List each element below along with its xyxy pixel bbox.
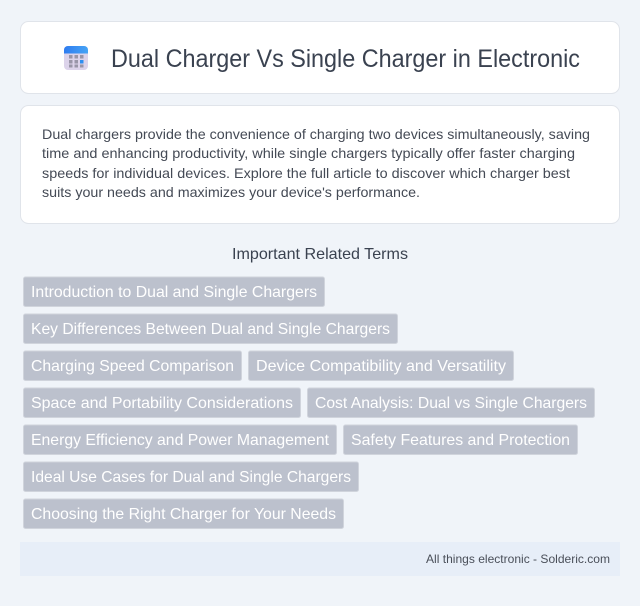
tag: [24, 351, 242, 380]
tag: [24, 499, 344, 528]
tag: Ideal Use Cases for Dual and Single Chargers: [31, 469, 351, 486]
tag: [24, 462, 358, 492]
intro text: Dual chargers provide the convenience of charging two devices simultaneously, saving: [42, 126, 590, 142]
intro panel: [20, 106, 620, 224]
intro text: suits your needs and maximizes your device's performance.: [42, 184, 420, 200]
tag: Introduction to Dual and Single Chargers: [31, 284, 317, 301]
tag: Space and Portability Considerations: [31, 395, 293, 412]
tag: Energy Efficiency and Power Management: [31, 432, 330, 449]
title: Dual Charger Vs Single Charger in Electronic: [111, 45, 580, 73]
tag: Choosing the Right Charger for Your Needs: [31, 506, 336, 523]
tag: [24, 425, 336, 454]
footer text: All things electronic - Solderic.com: [426, 552, 610, 566]
tag: [24, 314, 398, 344]
section heading: Important Related Terms: [232, 246, 408, 263]
tag: Safety Features and Protection: [351, 432, 570, 449]
tag: [24, 277, 324, 306]
tag: [248, 351, 514, 380]
header panel: [20, 22, 620, 94]
intro text: speeds for individual devices. Explore the full article to discover which charger best: [42, 165, 570, 181]
tag: [24, 388, 300, 418]
footer: [20, 542, 620, 576]
tag: Charging Speed Comparison: [31, 358, 234, 375]
intro text: time and enhancing productivity, while single chargers typically offer faster charging: [42, 145, 575, 161]
tag: Device Compatibility and Versatility: [256, 358, 506, 375]
tag: Cost Analysis: Dual vs Single Chargers: [315, 395, 587, 412]
tag: Key Differences Between Dual and Single Chargers: [31, 321, 390, 338]
intro text: [42, 126, 590, 200]
icon: calendar: [64, 46, 88, 70]
tag: [344, 425, 578, 454]
tag list: [24, 277, 594, 528]
tag: [308, 388, 594, 418]
